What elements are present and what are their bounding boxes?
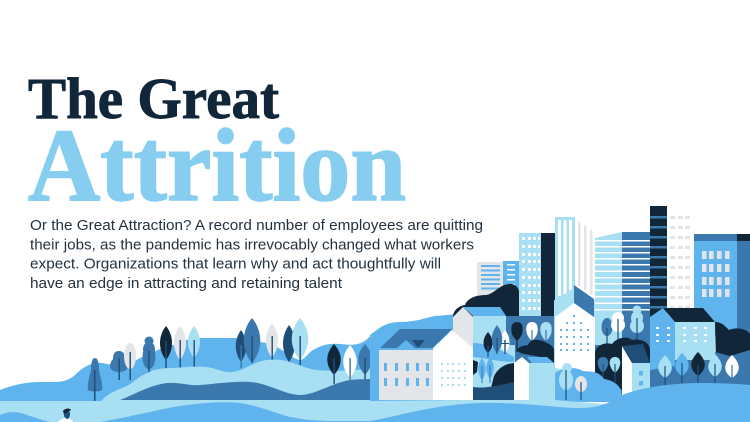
steel courtyard with trees — [506, 316, 555, 364]
courtyard navy hill — [490, 363, 514, 392]
tall striped tower — [555, 217, 594, 317]
person walking — [58, 409, 73, 422]
tree: mid blue — [675, 353, 689, 385]
blue office block — [694, 234, 750, 341]
tree: navy — [484, 332, 492, 357]
glass building — [595, 232, 650, 348]
tree: mid blue — [478, 358, 486, 383]
house: navy roof — [663, 308, 715, 322]
tree: white — [725, 355, 739, 384]
tree: pale leaf — [292, 318, 308, 365]
tree: pale — [658, 355, 672, 385]
left tree row — [88, 318, 308, 401]
courtyard left navy notch — [473, 360, 478, 375]
small house — [622, 344, 650, 396]
bush: navy — [595, 338, 650, 392]
tree: grey leaf — [174, 326, 186, 372]
mid blue wave behind village — [370, 315, 455, 402]
tree: steel — [598, 357, 608, 378]
tree: fir — [88, 358, 102, 401]
steel front hill — [120, 379, 382, 400]
tree: navy leaf — [327, 344, 341, 384]
title: The Great: The Great — [28, 66, 280, 131]
pale gabled block — [506, 345, 555, 400]
title: Attrition: Attrition — [28, 108, 406, 223]
pale middle hill — [102, 360, 380, 401]
navy striped tower — [650, 206, 667, 320]
courtyard dark hill — [473, 382, 514, 400]
tree: grey-white — [500, 330, 510, 354]
tree: pale — [630, 306, 644, 340]
tree: round steel — [110, 351, 128, 380]
tree: grey — [575, 376, 587, 400]
house: blue gable — [650, 308, 675, 370]
tree: pale leaf — [188, 326, 200, 368]
white dotted house — [554, 285, 595, 400]
intro text block: their jobs, as the pandemic has irrevocably changed what workers — [30, 236, 474, 254]
tree: dark steel leaf — [283, 325, 295, 362]
white windowed tower — [667, 212, 694, 322]
tree: steel leaf — [244, 318, 260, 363]
tree: double steel — [142, 336, 156, 375]
right ground, navy bush and tree row — [650, 308, 750, 388]
tree: white — [526, 322, 538, 348]
foreground river band — [0, 400, 610, 422]
foreground blue wave right — [100, 383, 750, 422]
tree: white leaf — [343, 345, 357, 380]
house: pale front — [675, 322, 715, 360]
striped low buildings — [477, 261, 519, 304]
tree: pale — [540, 322, 552, 348]
tree: navy leaf — [160, 326, 172, 375]
tree: grey leaf — [266, 323, 278, 360]
back hills — [0, 314, 460, 402]
village trees and navy bush — [555, 306, 650, 402]
intro text block: expect. Organizations that learn why and act thoughtfully will — [30, 256, 441, 272]
intro text block — [30, 217, 483, 292]
bush: mid blue — [555, 368, 622, 402]
tree: navy — [691, 352, 705, 385]
tree: pale — [610, 357, 620, 382]
intro text block: Or the Great Attraction? A record number of employees are quitting — [30, 217, 483, 234]
tree: steel — [492, 325, 502, 354]
large left house — [379, 329, 473, 400]
tree: mid blue — [486, 357, 494, 383]
centre house — [453, 307, 514, 400]
tree: dark steel leaf — [236, 330, 246, 368]
pale dotted tower and navy tower — [519, 233, 556, 318]
bush: navy — [517, 340, 554, 363]
intro text block: have an edge in attracting and retaining talent — [30, 275, 343, 292]
tree: pale — [559, 363, 573, 400]
tree: white — [611, 312, 625, 341]
tree: steel — [602, 318, 612, 345]
right tree row — [327, 344, 372, 384]
tree: navy — [511, 322, 523, 352]
tree: round grey — [124, 343, 136, 380]
tree: steel leaf — [358, 344, 372, 380]
tree: pale — [708, 354, 722, 385]
house windows — [656, 327, 707, 342]
navy bush behind centre house — [453, 284, 519, 318]
foreground blue wave left — [0, 412, 50, 422]
